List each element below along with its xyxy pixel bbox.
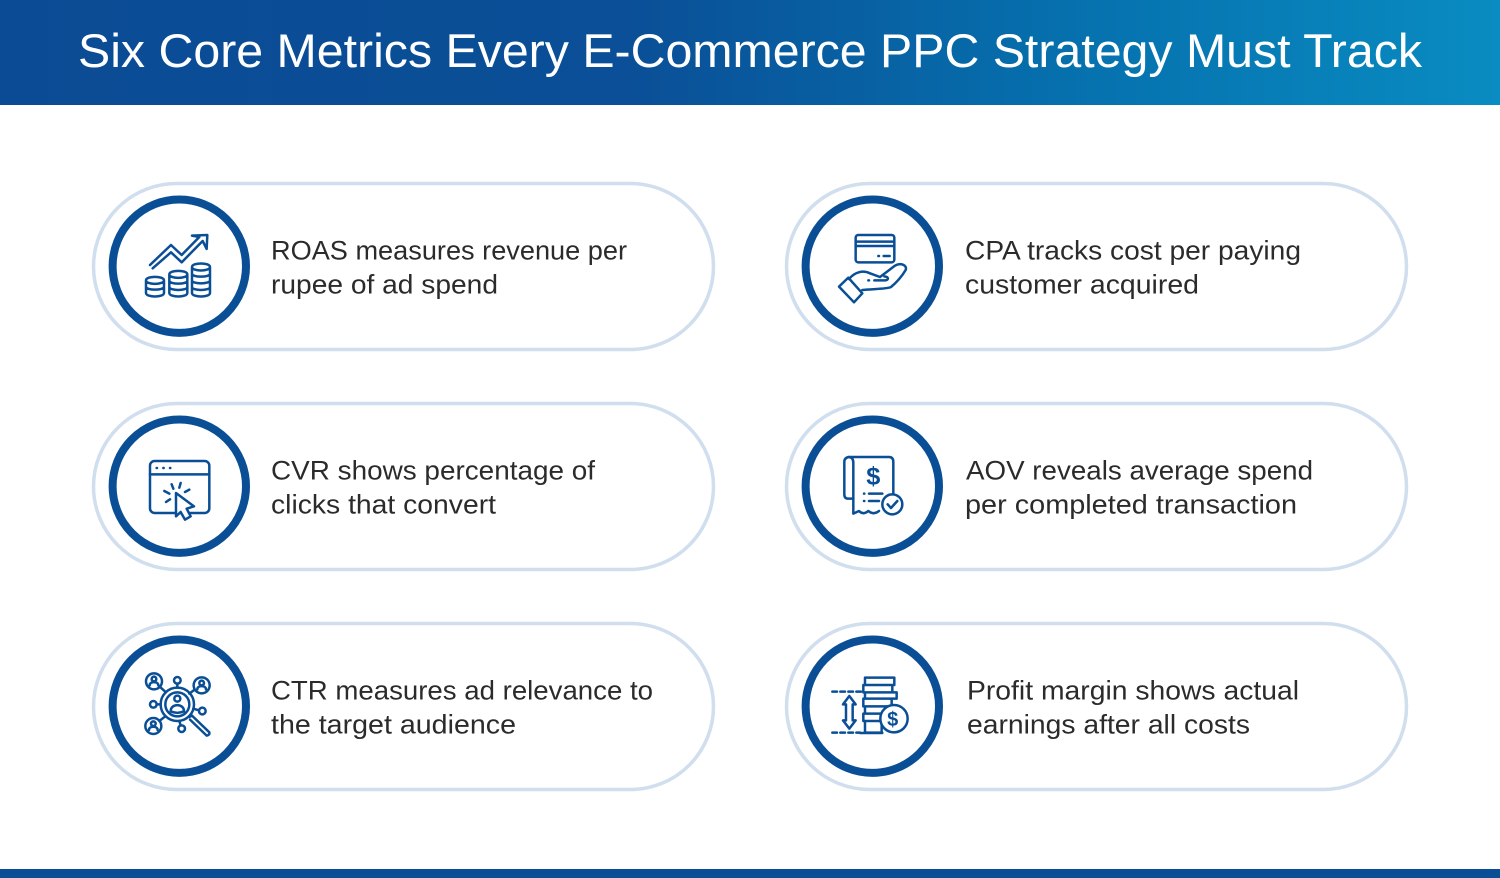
panel: CTR bbox=[94, 624, 714, 790]
text: CTR: the target audience bbox=[271, 710, 516, 740]
panel: CVR bbox=[94, 404, 714, 570]
text: AOV: per completed transaction bbox=[965, 490, 1297, 520]
text: CTR: CTR measures ad relevance to bbox=[271, 676, 653, 706]
icon: receipt with check bbox=[844, 457, 902, 514]
text: CPA: customer acquired bbox=[965, 270, 1199, 300]
text: Profit margin: Profit margin shows actual bbox=[967, 676, 1299, 706]
footer bar bbox=[0, 869, 1500, 878]
text: CVR: CVR shows percentage of bbox=[271, 456, 596, 486]
text: Profit margin: earnings after all costs bbox=[967, 710, 1250, 740]
text: CPA: CPA tracks cost per paying bbox=[965, 236, 1301, 266]
icon: browser window with cursor bbox=[150, 461, 209, 520]
icon: rising chart with coin stacks bbox=[146, 235, 210, 296]
title: Six Core Metrics Every E-Commerce PPC Strategy Must Track bbox=[78, 25, 1422, 78]
panel: ROAS bbox=[94, 184, 714, 350]
icon: receipt with check: $ bbox=[866, 462, 880, 490]
panel: Profit margin bbox=[786, 624, 1406, 790]
panel: CPA bbox=[786, 184, 1406, 350]
icon: coin stack with margin arrow: $ bbox=[887, 709, 898, 731]
panel: AOV bbox=[786, 404, 1406, 570]
text: ROAS: rupee of ad spend bbox=[271, 270, 498, 300]
icon: hand holding card bbox=[839, 235, 906, 302]
text: AOV: AOV reveals average spend bbox=[966, 456, 1313, 486]
text: CVR: clicks that convert bbox=[271, 490, 497, 520]
icon: audience magnifier bbox=[145, 673, 210, 736]
icon: coin stack with margin arrow bbox=[832, 678, 908, 733]
header banner bbox=[0, 0, 1500, 105]
text: ROAS: ROAS measures revenue per bbox=[271, 236, 627, 266]
